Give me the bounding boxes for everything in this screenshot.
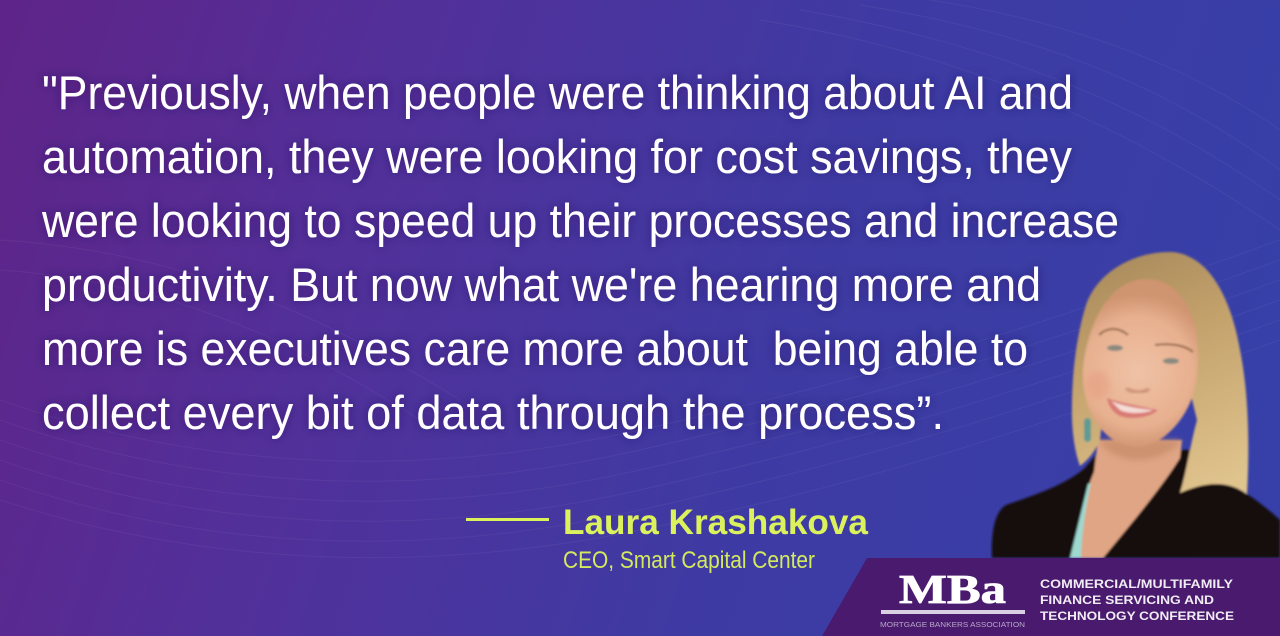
conference banner: [822, 558, 1280, 636]
quote text: automation, they were looking for cost savings, they: [42, 130, 1072, 183]
quote text: productivity. But now what we're hearing more and: [42, 258, 1041, 311]
nose shadow: [1126, 388, 1149, 392]
logo subtitle: MORTGAGE BANKERS ASSOCIATION: [880, 620, 1025, 629]
quote text: [41, 66, 1119, 439]
quote text: collect every bit of data through the process”.: [42, 386, 944, 439]
quote text: were looking to speed up their processes and increase: [41, 194, 1119, 247]
portrait photo: [992, 252, 1280, 558]
attribution rule: [466, 518, 549, 521]
quote text: more is executives care more about being able to: [42, 322, 1028, 375]
blouse: [1070, 483, 1091, 558]
eyes: [1107, 345, 1123, 351]
earring: [1084, 418, 1091, 442]
eyebrows: [1099, 329, 1193, 352]
logo wordmark: MBa: [899, 566, 1006, 612]
hair: [1072, 252, 1248, 494]
quote text: "Previously, when people were thinking about AI and: [42, 66, 1073, 119]
neck shadow: [1098, 440, 1182, 460]
conference name: TECHNOLOGY CONFERENCE: [1040, 611, 1234, 623]
banner background: [822, 558, 1280, 636]
face: [1083, 279, 1198, 447]
logo rule: [881, 610, 1025, 614]
MBA logo: [880, 566, 1025, 629]
mouth: [1107, 398, 1158, 418]
cheeks: [1086, 371, 1110, 399]
conference name: [1040, 579, 1234, 623]
jacket: [992, 450, 1280, 558]
neck and chest: [1074, 440, 1182, 558]
speaker name: Laura Krashakova: [563, 503, 869, 542]
speaker title: CEO, Smart Capital Center: [563, 547, 815, 574]
conference name: COMMERCIAL/MULTIFAMILY: [1040, 579, 1233, 591]
conference name: FINANCE SERVICING AND: [1040, 595, 1214, 607]
